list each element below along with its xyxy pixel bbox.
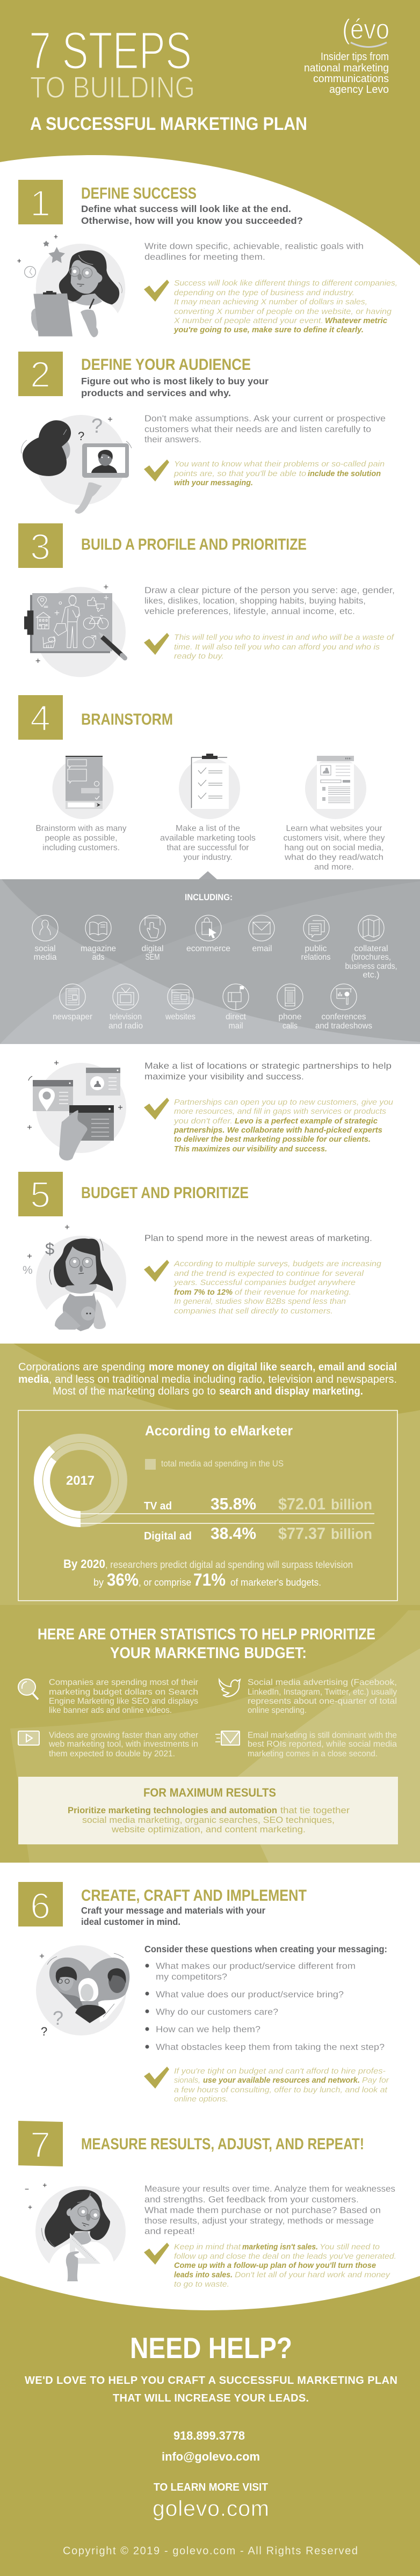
step 7 heading: MEASURE RESULTS, ADJUST, AND REPEAT! (81, 2135, 364, 2153)
tool labels row 2: and tradeshows (315, 1021, 372, 1031)
step 1 tip (173, 279, 397, 334)
2020 prediction: , researchers predict digital ad spending will surpass television (105, 1559, 353, 1570)
brainstorm text columns: Make a list of the (176, 824, 240, 833)
step 3 number badge (18, 523, 63, 568)
icon: email (249, 915, 274, 941)
step 5 illustration: woman with piggy bank: $ (45, 1239, 54, 1258)
intro statement (18, 1361, 397, 1397)
step 5 tip: companies that sell directly to customers. (174, 1307, 333, 1316)
stat: social media advertising: LinkedIn, Instagram, Twitter, etc.) usually (248, 1688, 397, 1697)
step 5 heading: BUDGET AND PRIORITIZE (81, 1184, 249, 1202)
tool labels row 1: public (305, 944, 327, 953)
Digital ad row: 38.4% (211, 1524, 256, 1543)
step 6 tip: If you're tight on budget and can't afford to hire profes- (174, 2067, 386, 2076)
icon: digital SEM (140, 915, 165, 941)
step 4 heading: BRAINSTORM (81, 711, 173, 728)
callout: for maximum results: that tie together (280, 1805, 350, 1815)
step 3 check icon (144, 633, 169, 655)
step 5 tip: years. Successful companies budget anywhere (173, 1278, 356, 1287)
step 2 tip: points are, so that you'll be able to (173, 469, 306, 478)
title: A SUCCESSFUL MARKETING PLAN (30, 114, 307, 134)
step 5 tip (173, 1259, 382, 1316)
agency tagline: communications (313, 73, 389, 85)
icon: conferences and tradeshows (331, 984, 357, 1010)
question list (145, 1961, 385, 2052)
brainstorm text columns: including customers. (42, 843, 120, 852)
2020 prediction: By 2020 (63, 1557, 105, 1571)
step 1 subheading: Otherwise, how will you know you succeeded? (81, 215, 303, 226)
TV ad row: billion (331, 1496, 372, 1513)
step 5 illustration: woman with piggy bank: % (23, 1264, 33, 1276)
TV ad row: TV ad (144, 1500, 172, 1512)
TV ad row: 35.8% (211, 1494, 256, 1513)
step 3 tip: This will tell you who to invest in and who will be a waste of (174, 633, 395, 642)
step 2 body text: their answers. (144, 434, 201, 444)
agency tagline: Insider tips from (321, 51, 389, 63)
stat: search engine marketing (49, 1678, 199, 1715)
step 2 subheading (81, 376, 269, 398)
step 2 number badge (18, 352, 63, 396)
step 7 tip: follow up and close the deal on the leads you've generated. (174, 2252, 396, 2261)
panel: step 4 (0, 695, 420, 1161)
step 2 body text: Don't make assumptions. Ask your current or prospective (144, 413, 386, 424)
tool labels row 2: newspaper (53, 1012, 93, 1021)
partnerships tip: Partnerships can open you up to new customers, give you (174, 1098, 394, 1107)
stat: search engine marketing: Engine Marketing like SEO and displays (49, 1697, 198, 1706)
step 5 number badge (18, 1172, 63, 1216)
step 3 body text: vehicle preferences, lifestyle, annual income, etc. (144, 606, 355, 616)
question list: Why do our customers care? (156, 2006, 278, 2017)
step 1 tip: It may mean achieving X number of dollars in sales, (174, 297, 367, 307)
stat: social media advertising (248, 1678, 397, 1715)
stat: video growth: Videos are growing faster than any other (49, 1731, 199, 1740)
2020 prediction: 36% (107, 1570, 139, 1589)
step 7 tip (174, 2243, 396, 2289)
website: golevo.com (153, 2496, 269, 2521)
step 6 tip (174, 2067, 389, 2104)
contact details: TO LEARN MORE VISIT (154, 2482, 268, 2493)
brainstorm text columns: and more. (314, 863, 354, 872)
Digital ad row (144, 1524, 372, 1543)
icon: public relations (303, 915, 329, 941)
tool labels row 1: (brochures, (351, 953, 391, 962)
tool labels row 1: ecommerce (186, 944, 230, 953)
tool labels row 1: relations (301, 953, 331, 962)
step 1 heading: DEFINE SUCCESS (81, 185, 197, 202)
question list: What obstacles keep them from taking the next step? (156, 2042, 385, 2052)
intro statement: media (18, 1374, 49, 1385)
panel: header (0, 0, 420, 290)
stat: video growth (48, 1731, 199, 1758)
TV ad row (144, 1494, 372, 1513)
partnerships tip: more resources, and fill in gaps with services or products (174, 1107, 387, 1116)
Digital ad row: Digital ad (144, 1530, 192, 1542)
step 7 body text: and repeat! (144, 2226, 195, 2236)
contact details: info@golevo.com (162, 2450, 260, 2463)
2020 prediction (63, 1557, 353, 1589)
step 7 tip: to go to waste. (174, 2280, 229, 2289)
step 7 body text: What made them purchase or not purchase? Based on (144, 2205, 381, 2215)
step 6 heading: CREATE, CRAFT AND IMPLEMENT (81, 1887, 307, 1904)
copyright: Copyright © 2019 - golevo.com - All Rights Reserved (63, 2545, 358, 2557)
panel: step 5 (18, 1172, 382, 1331)
partnerships body text: maximize your visibility and success. (144, 1071, 304, 1082)
icon: video player (18, 1731, 39, 1745)
step 3 body text: Draw a clear picture of the person you serve: age, gender, (144, 585, 395, 595)
intro statement: Corporations are spending (18, 1361, 145, 1373)
question list: my competitors? (156, 1972, 227, 1982)
icon: magnifying glass (18, 1679, 38, 1699)
step 1 tip: Success will look like different things to different companies, (174, 279, 397, 288)
step 5 tip: of their revenue for marketing. (235, 1288, 351, 1297)
brainstorm text columns: Brainstorm with as many (35, 824, 127, 833)
step 2 illustration: person on video call: ? (78, 429, 84, 443)
contact details (154, 2429, 268, 2493)
step 2 tip: include the solution (308, 469, 381, 478)
icon: social media (32, 915, 58, 941)
step 3 tip: ready to buy. (174, 652, 224, 661)
step 1 illustration: woman with clipboard (17, 235, 136, 342)
panel: budget statistics band (0, 1344, 420, 1863)
step 1 tip: Whatever metric (325, 316, 388, 325)
step 3 tip: time. It will also tell you who can afford you and who is (174, 643, 380, 652)
TV ad row: $72.01 (278, 1494, 325, 1513)
step 1 body text (144, 241, 364, 262)
question list: What makes our product/service different from (156, 1961, 356, 1971)
footer message (25, 2375, 397, 2404)
2020 prediction: 71% (193, 1570, 226, 1589)
stat: social media advertising: online spending. (248, 1706, 307, 1715)
data box heading: According to eMarketer (145, 1422, 293, 1439)
tool labels row 1: collateral (354, 944, 388, 953)
step 6 illustration: customers in a heart (36, 1945, 129, 2038)
2020 prediction: by (93, 1577, 104, 1588)
step 1 tip: converting X number of people on the website, or having (174, 307, 392, 316)
tool labels row 1: business cards, (345, 962, 397, 971)
tool labels row 1: media (33, 953, 57, 962)
step 7 check icon (144, 2243, 169, 2265)
brainstorm text columns: what do they read/watch (284, 853, 383, 862)
partnerships tip (173, 1098, 394, 1154)
step 1 subheading: Define what success will look like at the end. (81, 203, 291, 214)
step 1 number badge: 1 (30, 183, 50, 224)
brainstorm text columns: Learn what websites your (286, 824, 382, 833)
step 5 tip: According to multiple surveys, budgets are increasing (173, 1259, 382, 1268)
step 5 number badge: 5 (30, 1174, 50, 1215)
step 6 subheading: Craft your message and materials with your (81, 1905, 265, 1916)
step 1 body text: deadlines for meeting them. (144, 252, 265, 262)
step 2 subheading: products and services and why. (81, 388, 231, 398)
tool labels row 2: mail (229, 1021, 243, 1031)
brainstorm text columns: that are successful for (166, 843, 249, 852)
step 7 illustration: woman with ruler (25, 2184, 126, 2281)
tool labels row 1: ads (92, 953, 104, 962)
step 6 subheading (81, 1905, 265, 1927)
question list: How can we help them? (156, 2024, 260, 2034)
step 6 number badge (18, 1882, 63, 1926)
panel: eMarketer data box (18, 1411, 397, 1601)
step 3 illustration: customer profile board (24, 585, 126, 677)
stat: social media advertising: Social media advertising (Facebook, (248, 1678, 397, 1687)
tool labels row 1 (33, 944, 397, 980)
icon: chat phone (53, 756, 114, 819)
illustration: location and partner windows (27, 1061, 126, 1161)
step 5 illustration: woman with piggy bank (23, 1225, 129, 1331)
stat: video growth: web marketing tool, with investments in (48, 1740, 198, 1749)
step 2 illustration: person on video call (21, 415, 132, 514)
step 7 tip: Keep in mind that (174, 2243, 241, 2251)
brainstorm text columns: your industry. (184, 853, 232, 862)
icon: email envelope (215, 1731, 240, 1745)
icon: television and radio (113, 984, 139, 1010)
brainstorm text columns (35, 824, 385, 872)
icon: website profile page (305, 756, 366, 819)
callout: for maximum results: Prioritize marketing technologies and automation (68, 1805, 277, 1815)
icon: magazine ads (85, 915, 111, 941)
step 2 body text: customers what their needs are and listen carefully to (144, 424, 371, 434)
questions heading: Consider these questions when creating your messaging: (144, 1944, 387, 1954)
stat: social media advertising: represents about one-quarter of total (248, 1697, 397, 1706)
agency tagline (304, 51, 389, 96)
agency tagline: national marketing (304, 62, 389, 74)
step 6 check icon (144, 2067, 169, 2089)
panel: step 6 (18, 1882, 389, 2104)
donut chart: 2017 ad spending (38, 1438, 123, 1523)
step 6 illustration: customers in a heart: ? (41, 2025, 47, 2038)
tool labels row 2 (53, 1012, 372, 1031)
stat: search engine marketing: marketing budget dollars on Search (49, 1688, 198, 1697)
panel: step 7 (18, 2121, 396, 2289)
panel: step 2 (18, 352, 386, 514)
panel: step 1 (17, 180, 397, 342)
tool labels row 2: direct (226, 1012, 247, 1021)
step 3 tip (174, 633, 395, 661)
step 6 tip: a few hours of consulting, offer to buy lunch, and look at (174, 2085, 388, 2095)
step 7 body text: and strengths. Get feedback from your customers. (144, 2194, 359, 2205)
stat: search engine marketing: Companies are spending most of their (49, 1678, 199, 1687)
footer heading: NEED HELP? (130, 2331, 292, 2365)
panel: footer call to action (0, 2276, 420, 2576)
tool labels row 2: calls (283, 1021, 298, 1031)
brainstorm text columns: available marketing tools (160, 834, 256, 843)
question list: What value does our product/service bring? (156, 1989, 344, 1999)
icon: twitter bird (219, 1680, 240, 1697)
Digital ad row: billion (331, 1526, 372, 1542)
step 7 tip: Don't let all of your hard work and money (235, 2271, 391, 2279)
step 7 body text: Measure your results over time. Analyze them for weaknesses (144, 2184, 395, 2194)
tool labels row 1: digital (142, 944, 163, 953)
icon: websites (168, 984, 193, 1010)
step 7 body text: those results, adjust your strategy, methods or message (144, 2216, 374, 2225)
callout: for maximum results (18, 1777, 398, 1844)
step 7 number badge: 7 (30, 2125, 50, 2165)
intro statement: more money on digital like search, email and social (149, 1361, 397, 1373)
step 3 heading: BUILD A PROFILE AND PRIORITIZE (81, 536, 307, 553)
legend: total media ad spending in the US (161, 1458, 284, 1469)
step 1 number badge (18, 180, 63, 224)
step 6 tip: sionals, (174, 2076, 200, 2085)
step 4 number badge (18, 695, 63, 740)
tool labels row 1: SEM (145, 953, 160, 962)
stat: video growth: them expected to double by 2021. (49, 1749, 175, 1758)
agency tagline: agency Levo (329, 84, 389, 96)
partnerships tip: you don't offer. (173, 1116, 233, 1126)
statistics heading: YOUR MARKETING BUDGET: (110, 1645, 307, 1662)
intro statement: Most of the marketing dollars go to (53, 1385, 216, 1397)
step 5 body text: Plan to spend more in the newest areas of marketing. (144, 1233, 372, 1243)
step 2 heading: DEFINE YOUR AUDIENCE (81, 356, 251, 374)
footer message: THAT WILL INCREASE YOUR LEADS. (113, 2392, 309, 2404)
title: 7 STEPS (29, 21, 192, 80)
stat: email marketing: marketing comes in a close second. (248, 1749, 378, 1758)
intro statement: search and display marketing. (219, 1385, 363, 1397)
footer message: WE'D LOVE TO HELP YOU CRAFT A SUCCESSFUL MARKETING PLAN (25, 2375, 397, 2387)
step 6 tip: online options. (174, 2095, 228, 2104)
step 2 illustration: person on video call: ? (91, 415, 103, 437)
step 2 check icon (144, 459, 169, 481)
tool labels row 2: and radio (108, 1021, 143, 1031)
step 7 number badge (18, 2121, 63, 2166)
stat: email marketing: best ROIs reported, while social media (248, 1740, 397, 1749)
step 1 tip: depending on the type of business and industry. (174, 288, 354, 297)
Digital ad row: $77.37 (278, 1524, 325, 1543)
title (29, 21, 307, 134)
intro statement: , and less on traditional media including radio, television and newspapers. (49, 1374, 397, 1385)
step 1 tip: you're going to use, make sure to define it clearly. (173, 325, 364, 334)
step 1 check icon (144, 280, 169, 302)
step 2 tip: You want to know what their problems or so-called pain (174, 459, 385, 469)
step 6 subheading: ideal customer in mind. (81, 1916, 180, 1927)
stat: email marketing: Email marketing is still dominant with the (248, 1731, 397, 1740)
step 1 tip: X number of people attend your event. (173, 316, 323, 325)
step 7 tip: marketing isn't sales. (242, 2243, 318, 2251)
partnerships tip: to deliver the best marketing possible for our clients. (174, 1135, 371, 1144)
partnerships tip: Levo is a perfect example of strategic (235, 1116, 378, 1126)
tool labels row 1: social (34, 944, 56, 953)
partnerships body text: Make a list of locations or strategic partnerships to help (144, 1061, 392, 1071)
tool labels row 2: conferences (321, 1012, 366, 1021)
step 2 tip: with your messaging. (174, 478, 253, 487)
tool labels row 2: websites (165, 1012, 195, 1021)
partnerships tip: partnerships. We collaborate with hand-picked experts (173, 1126, 382, 1135)
step 2 number badge: 2 (30, 354, 50, 395)
callout: for maximum results: website optimization, and content marketing. (111, 1824, 306, 1835)
step 5 tip: from 7% to 12% (174, 1288, 233, 1297)
tool labels row 2: phone (278, 1012, 302, 1021)
partnerships tip: This maximizes our visibility and success. (174, 1144, 327, 1154)
panel: marketing tools band (0, 871, 420, 1044)
step 7 body text (144, 2184, 395, 2236)
brainstorm text columns: customers visit, where they (284, 834, 385, 843)
icon: direct mail (223, 984, 249, 1010)
brainstorm text columns: hang out on social media, (285, 843, 383, 852)
2020 prediction: , or comprise (139, 1577, 191, 1588)
stat: search engine marketing: like banner ads and online videos. (49, 1706, 172, 1715)
step 2 body text (144, 413, 386, 444)
step 6 illustration: customers in a heart: ? (53, 2007, 63, 2029)
step 6 number badge: 6 (30, 1886, 50, 1926)
step 6 tip: Pay for (362, 2076, 389, 2085)
title: TO BUILDING (30, 70, 195, 105)
logo: Levo: (évo (342, 14, 389, 45)
including heading: INCLUDING: (185, 892, 233, 902)
step 2 tip (173, 459, 385, 487)
statistics heading (38, 1626, 375, 1662)
partnerships check icon (144, 1098, 169, 1120)
icon: newspaper (60, 984, 85, 1010)
step 7 tip: You still need to (320, 2243, 380, 2251)
callout: for maximum results: FOR MAXIMUM RESULTS (143, 1786, 276, 1799)
step 7 tip: Come up with a follow-up plan of how you'll turn those (174, 2261, 376, 2270)
icon: ecommerce (195, 915, 221, 941)
icon: checklist clipboard (179, 754, 240, 819)
step 2 subheading: Figure out who is most likely to buy your (81, 376, 269, 386)
step 1 subheading (81, 203, 303, 226)
step 3 number badge: 3 (30, 527, 50, 567)
icon: collateral (358, 915, 384, 941)
contact details: 918.899.3778 (173, 2429, 245, 2442)
stat: email marketing (248, 1731, 397, 1758)
donut chart: 2017 ad spending: 2017 (66, 1473, 95, 1488)
step 5 check icon (144, 1260, 169, 1282)
step 1 body text: Write down specific, achievable, realistic goals with (144, 241, 364, 251)
2020 prediction: of marketer's budgets. (230, 1577, 321, 1588)
step 3 body text: likes, dislikes, location, shopping habits, buying habits, (144, 596, 366, 605)
brainstorm text columns: people as possible, (45, 834, 117, 843)
step 6 tip: use your available resources and network. (203, 2076, 360, 2085)
step 3 body text (144, 585, 395, 616)
partnerships body text (144, 1061, 392, 1082)
tool labels row 1: magazine (81, 944, 116, 953)
callout: for maximum results: social media marketing, organic searches, SEO techniques, (82, 1815, 335, 1825)
panel: step 3 (18, 523, 395, 677)
tool labels row 2: television (110, 1012, 142, 1021)
icon: phone calls (277, 984, 303, 1010)
step 7 tip: leads into sales. (174, 2271, 233, 2279)
tool labels row 1: etc.) (363, 970, 379, 980)
step 5 tip: In general, studies show B2Bs spend less than (174, 1297, 346, 1306)
step 5 tip: and the trend is expected to continue for several (174, 1269, 364, 1278)
step 4 number badge: 4 (30, 698, 50, 739)
tool labels row 1: email (252, 944, 272, 953)
